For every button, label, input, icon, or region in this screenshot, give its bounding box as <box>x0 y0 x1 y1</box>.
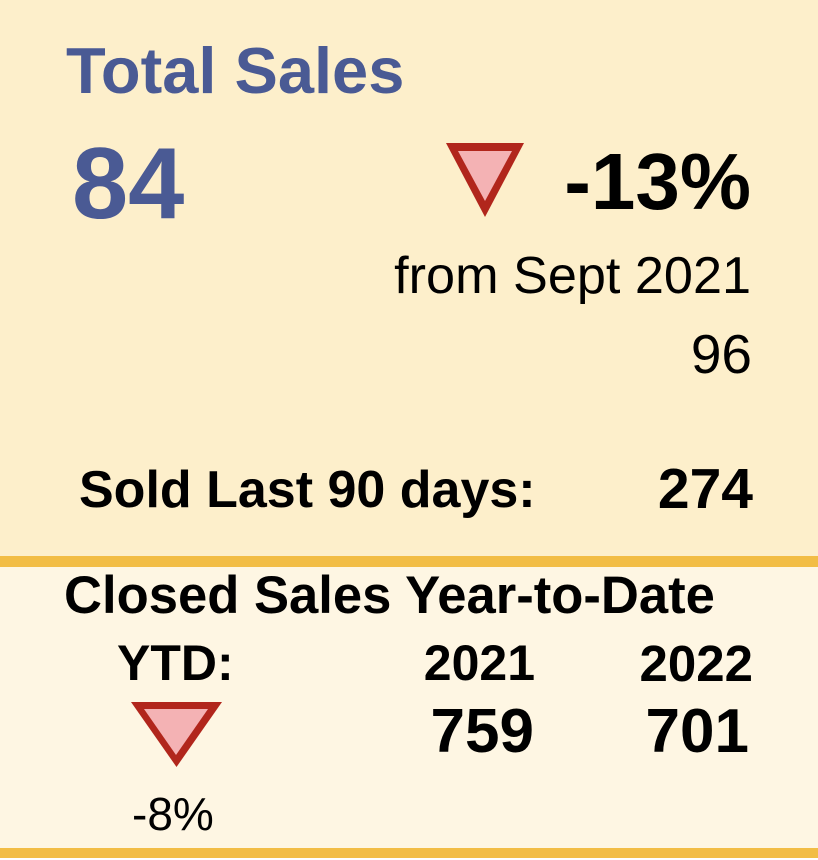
divider bar: bottom <box>0 848 818 858</box>
label: 2022: 2022 <box>640 635 753 692</box>
panel: total sales <box>0 0 818 556</box>
label: YTD: YTD: <box>117 635 234 691</box>
value: 701: 701 <box>646 697 749 766</box>
icon: down triangle <box>446 143 524 217</box>
panel: closed sales year-to-date <box>0 567 818 848</box>
icon: down triangle <box>131 702 222 767</box>
text: from Sept 2021: from Sept 2021 <box>394 247 751 305</box>
label: 2021: 2021 <box>424 635 535 691</box>
change: -13%: -13% <box>564 137 751 226</box>
value: 84: 84 <box>72 128 184 240</box>
value: 759: 759 <box>431 697 534 766</box>
label: Sold Last 90 days: Sold Last 90 days: <box>79 461 536 519</box>
change: -8%: -8% <box>132 788 214 840</box>
divider bar: top <box>0 556 818 567</box>
heading: Total Sales: Total Sales <box>66 34 404 107</box>
heading: Closed Sales Year-to-Date: Closed Sales Year-to-Date <box>64 566 715 625</box>
value: 96: 96 <box>691 323 752 385</box>
value: 274: 274 <box>658 457 753 521</box>
